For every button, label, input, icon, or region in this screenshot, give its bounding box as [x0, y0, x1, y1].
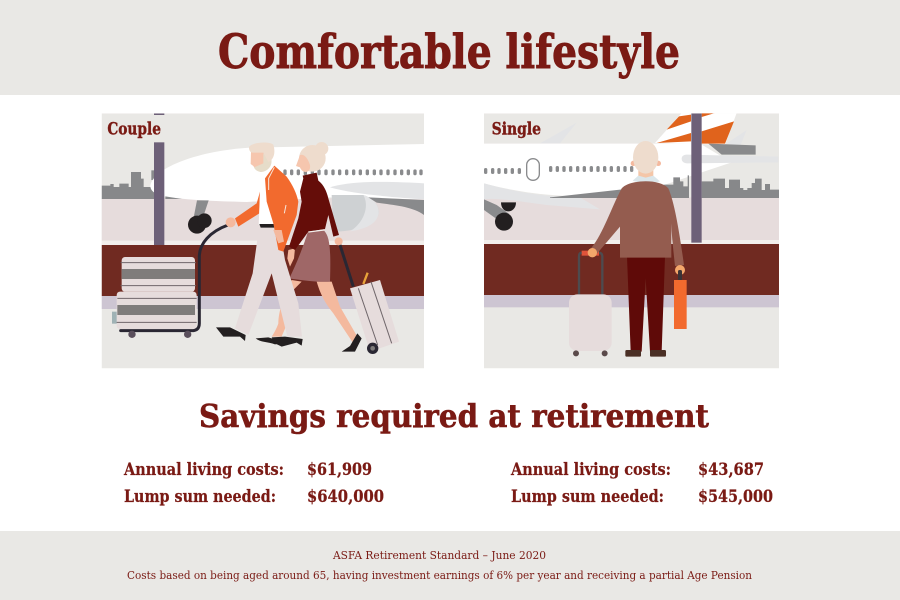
costs: couple: $640,000 — [307, 487, 384, 507]
skyline — [665, 175, 779, 198]
skyline — [102, 172, 155, 199]
costs: single: $43,687 — [698, 460, 764, 480]
heading: savings required: Savings required at retirement — [199, 397, 709, 435]
label: Couple: Couple — [107, 120, 161, 139]
woman — [256, 142, 399, 354]
suitcase — [569, 251, 612, 356]
costs: couple: Annual living costs: — [123, 460, 284, 480]
footer band — [0, 531, 900, 600]
luggage trolley — [112, 225, 228, 338]
costs: single: $545,000 — [698, 487, 773, 507]
header band — [0, 0, 900, 95]
costs: couple — [123, 460, 384, 507]
pole — [154, 113, 164, 245]
panel: single illustration — [484, 113, 779, 368]
orange bag — [674, 270, 687, 329]
costs: single: Lump sum needed: — [511, 487, 664, 507]
costs: couple: Lump sum needed: — [124, 487, 276, 507]
costs: single: Annual living costs: — [510, 460, 671, 480]
pole — [691, 113, 702, 243]
airplane — [484, 113, 779, 231]
panel: couple illustration — [102, 113, 424, 368]
label: Single: Single — [492, 120, 541, 139]
title: Comfortable lifestyle — [218, 25, 680, 80]
airplane — [150, 144, 424, 234]
costs: couple: $61,909 — [307, 460, 372, 480]
standing man — [588, 141, 685, 357]
costs: single — [510, 460, 773, 507]
assumptions note: Costs based on being aged around 65, having investment earnings of 6% per year and receiving a partial Age Pension — [127, 568, 753, 582]
source note: ASFA Retirement Standard – June 2020 — [332, 548, 546, 562]
man — [216, 143, 303, 347]
